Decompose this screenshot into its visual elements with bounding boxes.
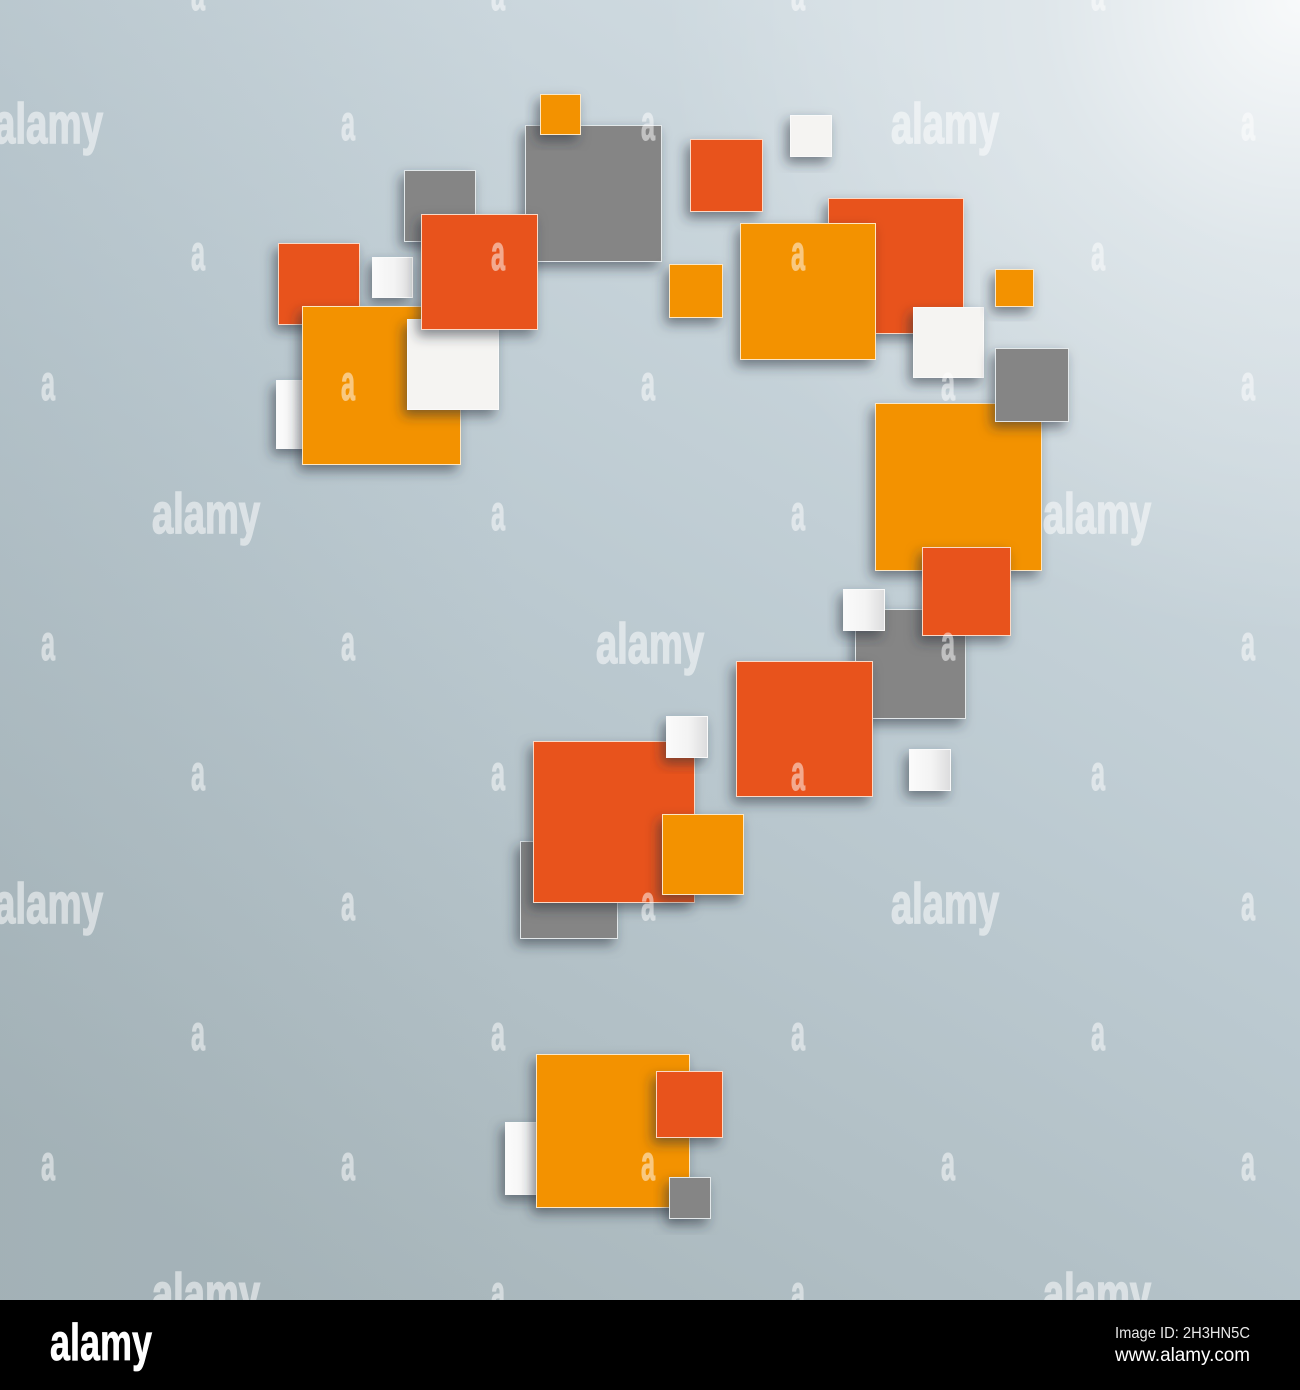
square: white right (914, 308, 984, 378)
square: orange largest right (876, 404, 1042, 570)
square: grey hook (856, 610, 966, 718)
watermark text overlay: a (791, 1265, 806, 1321)
square: grey large top (526, 126, 662, 262)
footer image id: Image ID: 2H3HN5C (1115, 1325, 1250, 1342)
watermark text overlay: a (641, 95, 656, 151)
watermark text overlay: a (641, 875, 656, 931)
square: orange large left (302, 306, 460, 464)
watermark text overlay: a (491, 1265, 506, 1321)
question mark: upper arc of squares (276, 94, 1034, 464)
watermark text overlay: a (791, 745, 806, 801)
square: red dot (656, 1072, 722, 1138)
square: red large stem (736, 662, 872, 796)
square: red largest stem (534, 742, 694, 902)
watermark text overlay: a (791, 1005, 806, 1061)
square: white medium (408, 320, 498, 410)
watermark text overlay: alamy (1043, 1262, 1151, 1326)
square: red hook (922, 548, 1010, 636)
watermark text overlay: a (491, 485, 506, 541)
watermark text overlay: a (1241, 95, 1256, 151)
question mark: lower stem squares (520, 716, 744, 938)
watermark text overlay: a (341, 95, 356, 151)
watermark text overlay: alamy (152, 1262, 260, 1326)
watermark text overlay: alamy (891, 872, 999, 936)
watermark text overlay: a (1091, 745, 1106, 801)
watermark text overlay: a (491, 745, 506, 801)
watermark text overlay: a (791, 485, 806, 541)
watermark text overlay: a (1241, 1135, 1256, 1191)
watermark text overlay: a (941, 615, 956, 671)
square: white tiny hook (844, 590, 884, 630)
watermark text overlay: alamy (596, 612, 704, 676)
watermark text overlay: a (41, 615, 56, 671)
square: white left (276, 380, 336, 448)
watermark text overlay: a (41, 1135, 56, 1191)
square: red top left (278, 244, 360, 324)
footer website: www.alamy.com (1114, 1345, 1250, 1366)
square: red large top right (828, 198, 964, 334)
square: orange on stem (662, 814, 744, 894)
watermark text overlay: a (341, 615, 356, 671)
watermark text overlay: a (191, 225, 206, 281)
watermark text overlay: alamy (152, 482, 260, 546)
square: orange large top right (740, 224, 876, 360)
watermark text overlay: a (1241, 875, 1256, 931)
question mark: dot squares (506, 1054, 722, 1218)
watermark text overlay: a (1091, 1005, 1106, 1061)
square: red medium (422, 214, 538, 330)
watermark text overlay: a (941, 355, 956, 411)
square: white dot left (506, 1122, 556, 1194)
square: orange dot (536, 1054, 690, 1208)
square: grey under stem (520, 842, 618, 938)
square: orange tiny right (996, 270, 1034, 306)
watermark text overlay: a (1091, 225, 1106, 281)
square: grey right (996, 348, 1068, 422)
square: orange small center (670, 264, 722, 318)
watermark text overlay: a (491, 225, 506, 281)
square: white tiny on stem (666, 716, 708, 758)
watermark text overlay: a (641, 355, 656, 411)
square: grey small top (404, 170, 476, 242)
watermark text overlay: a (191, 745, 206, 801)
watermark text overlay: alamy (891, 92, 999, 156)
watermark text overlay: a (341, 875, 356, 931)
watermark text overlay: a (191, 1005, 206, 1061)
square: white tiny stem (910, 750, 950, 790)
square: grey dot (670, 1178, 710, 1218)
footer bar (0, 1300, 1300, 1390)
watermark text overlay: a (491, 1005, 506, 1061)
watermark text overlay: a (791, 225, 806, 281)
footer logo: alamy (50, 1314, 152, 1372)
watermark text overlay: a (641, 1135, 656, 1191)
watermark text overlay: a (941, 1135, 956, 1191)
watermark text overlay: a (1241, 355, 1256, 411)
watermark text overlay: a (341, 355, 356, 411)
square: white tiny (372, 258, 412, 298)
watermark text overlay: a (341, 1135, 356, 1191)
watermark text overlay: a (41, 355, 56, 411)
square: white tiny top right (790, 116, 832, 156)
watermark text overlay: alamy (1043, 482, 1151, 546)
square: orange tiny top (540, 94, 580, 134)
question mark: right side and hook squares (736, 348, 1068, 796)
square: red small top (690, 140, 762, 212)
watermark text overlay: a (1241, 615, 1256, 671)
